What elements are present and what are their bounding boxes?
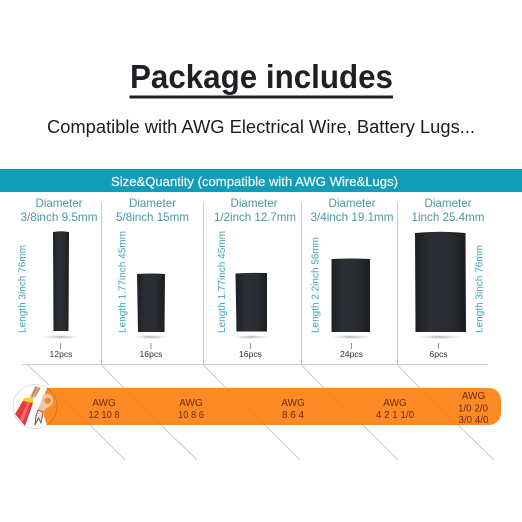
AWG label: 1/0 to 4/0: 1/0 2/0 xyxy=(458,404,488,414)
AWG label: 8 6 4: AWG xyxy=(281,398,305,409)
AWG label: 4 2 1 1/0: AWG xyxy=(383,398,407,409)
AWG label: 12 10 8: 12 10 8 xyxy=(88,410,120,421)
AWG label: 8 6 4 xyxy=(281,398,305,421)
AWG label: 10 8 6 xyxy=(178,398,204,421)
AWG label: 4 2 1 1/0 xyxy=(376,398,414,421)
column 4: 3/4 inch tube: 24pcs xyxy=(340,349,363,359)
column 3: 1/2 inch tube: 16pcs xyxy=(239,349,262,359)
icon: wire and lug xyxy=(15,386,53,426)
column 1: 3/8 inch tube xyxy=(16,197,98,359)
column 2: 5/8 inch tube xyxy=(116,197,189,359)
column 2: 5/8 inch tube: Length 1.77inch 45mm xyxy=(116,231,128,333)
orange AWG band xyxy=(43,388,501,425)
column 5: 1 inch tube: 6pcs xyxy=(429,349,448,359)
column 4: 3/4 inch tube: Diameter xyxy=(328,197,376,210)
diagonal guide lines xyxy=(28,365,494,460)
column 1: 3/8 inch tube: Length 3inch 76mm xyxy=(16,245,28,333)
column 5: 1 inch tube: 1inch 25.4mm xyxy=(412,211,484,224)
AWG label: 12 10 8: AWG xyxy=(92,398,116,409)
icon: wire and lug circle xyxy=(13,384,57,428)
AWG label: 10 8 6: AWG xyxy=(179,398,203,409)
AWG label: 1/0 to 4/0: AWG xyxy=(462,391,485,402)
AWG label: 1/0 to 4/0 xyxy=(458,391,489,426)
column 3: 1/2 inch tube: 1/2inch 12.7mm xyxy=(214,211,296,224)
AWG label: 12 10 8 xyxy=(88,398,120,421)
AWG label: 4 2 1 1/0: 4 2 1 1/0 xyxy=(376,410,414,421)
column 5: 1 inch tube: Length 3inch 76mm xyxy=(474,245,486,333)
subtitle: Compatible with AWG Electrical Wire, Battery Lugs... xyxy=(47,117,475,137)
column 1: 3/8 inch tube: Diameter xyxy=(35,197,83,210)
column 2: 5/8 inch tube: Diameter xyxy=(129,197,176,210)
column 2: 5/8 inch tube: 5/8inch 15mm xyxy=(116,211,189,224)
column frame lines xyxy=(22,202,488,364)
column 5: 1 inch tube: Diameter xyxy=(424,197,472,210)
teal header band: Size&Quantity (compatible with AWG Wire&Lugs) xyxy=(111,174,398,189)
AWG label: 10 8 6: 10 8 6 xyxy=(178,410,204,421)
column 1: 3/8 inch tube: 3/8inch 9.5mm xyxy=(20,211,98,224)
column 4: 3/4 inch tube: 3/4inch 19.1mm xyxy=(310,211,394,224)
column 4: 3/4 inch tube: Length 2.2inch 56mm xyxy=(310,237,322,333)
column 5: 1 inch tube xyxy=(412,197,486,359)
column 3: 1/2 inch tube xyxy=(214,197,296,359)
AWG label: 1/0 to 4/0: 3/0 4/0 xyxy=(458,415,489,426)
column 4: 3/4 inch tube xyxy=(310,197,394,359)
column 3: 1/2 inch tube: Diameter xyxy=(230,197,278,210)
teal header band xyxy=(0,169,522,192)
column 2: 5/8 inch tube: 16pcs xyxy=(140,349,162,359)
AWG label: 8 6 4: 8 6 4 xyxy=(282,410,304,421)
column 3: 1/2 inch tube: Length 1.77inch 45mm xyxy=(216,231,228,333)
title: Package includes xyxy=(130,58,393,95)
column 1: 3/8 inch tube: 12pcs xyxy=(50,349,72,359)
